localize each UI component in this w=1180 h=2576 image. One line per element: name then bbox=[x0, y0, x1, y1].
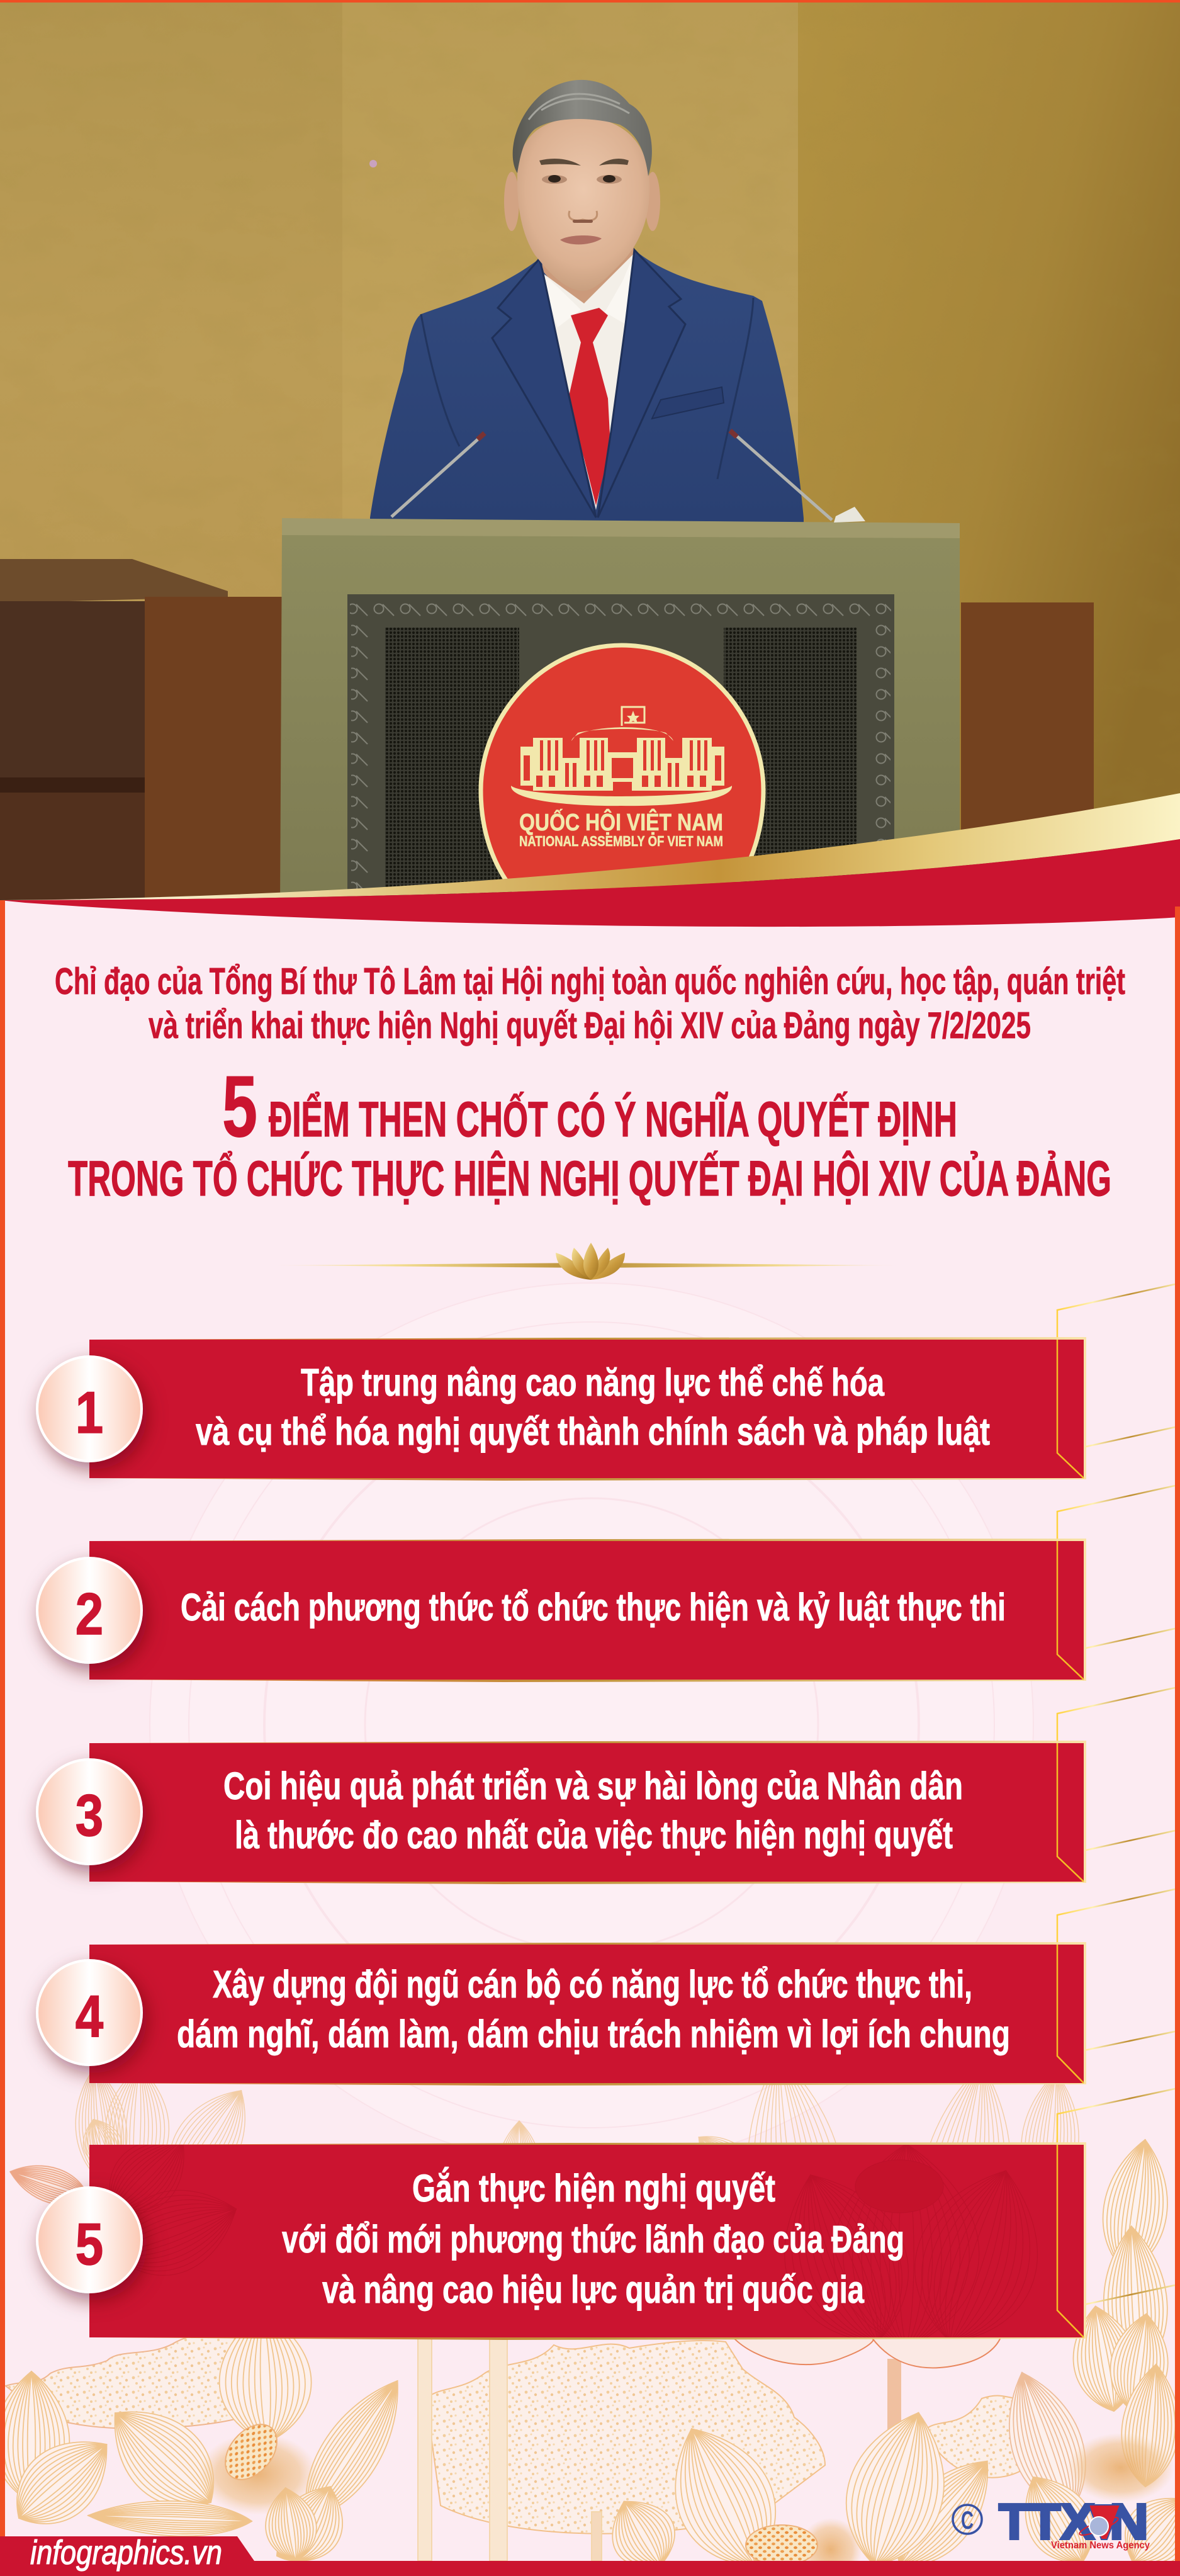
card bbox=[89, 1741, 1086, 1884]
item 2 bbox=[37, 1539, 1086, 1682]
card text: Gắn thực hiện nghị quyết bbox=[412, 2167, 775, 2210]
card text: là thước đo cao nhất của việc thực hiện nghị quyết bbox=[235, 1814, 953, 1856]
emblem text: NATIONAL ASSEMBLY OF VIET NAM bbox=[519, 833, 723, 849]
number badge: 4 bbox=[76, 1984, 104, 2049]
left speaker mesh bbox=[385, 628, 519, 901]
left side petal bbox=[5, 2155, 94, 2213]
suit bbox=[370, 250, 804, 523]
faint upper lotus outlines bbox=[69, 2050, 1084, 2298]
card text bbox=[223, 1765, 963, 1856]
item 3 bbox=[37, 1741, 1086, 1884]
item 5 bbox=[28, 2142, 1086, 2340]
red ribbon bbox=[0, 839, 1180, 927]
lotus seed pod bbox=[746, 2525, 818, 2565]
ears bbox=[504, 172, 660, 231]
agency name: Vietnam News Agency bbox=[1051, 2540, 1150, 2551]
stamen tuft bbox=[1067, 2433, 1174, 2502]
card text: với đổi mới phương thức lãnh đạo của Đảng bbox=[282, 2218, 904, 2261]
emblem text bbox=[519, 808, 723, 849]
frame overlay bbox=[1057, 1340, 1084, 1478]
number badge: 3 bbox=[76, 1783, 103, 1848]
podium inset panel bbox=[347, 594, 894, 903]
TTXVN logo bbox=[953, 2494, 1150, 2551]
tie bbox=[568, 308, 610, 506]
lower flower base under card five bbox=[733, 2337, 1001, 2368]
title: 5 bbox=[222, 1058, 257, 1155]
gold frame: item 2 bbox=[1057, 1486, 1175, 1654]
frame overlay bbox=[1057, 1945, 1084, 2083]
website text: infographics.vn bbox=[30, 2534, 222, 2572]
top border bar bbox=[0, 0, 1180, 3]
frame overlay bbox=[1057, 1541, 1084, 1680]
number badge: 2 bbox=[76, 1581, 103, 1647]
eyebrows bbox=[539, 159, 629, 166]
divider with gold lotus bbox=[269, 1243, 903, 1280]
number badge: 1 bbox=[76, 1380, 103, 1445]
footer tab bbox=[0, 2534, 254, 2572]
card text: và nâng cao hiệu lực quản trị quốc gia bbox=[322, 2268, 865, 2311]
number badge bbox=[37, 1760, 142, 1864]
National Assembly emblem bbox=[481, 645, 763, 900]
stamen tuft bbox=[198, 2433, 318, 2515]
frame overlay bbox=[1057, 2145, 1084, 2337]
icon: gold lotus bbox=[556, 1243, 625, 1280]
centre right flower bbox=[597, 2400, 1011, 2576]
lotus lines showing through card bbox=[110, 2145, 1038, 2337]
right speaker mesh bbox=[724, 628, 857, 901]
bottom red bar bbox=[0, 2561, 1180, 2576]
right side petals bbox=[1064, 2135, 1177, 2417]
face bbox=[517, 116, 649, 291]
small petal tips above card five bbox=[76, 2113, 767, 2216]
shirt bbox=[539, 253, 634, 510]
lower left flower bbox=[0, 2310, 422, 2573]
nose bbox=[569, 211, 597, 223]
copyright mark: C bbox=[961, 2507, 974, 2534]
card bbox=[89, 2142, 1086, 2340]
card bbox=[89, 1942, 1086, 2086]
lotus seed pod bbox=[215, 2414, 287, 2490]
speaker figure bbox=[370, 80, 804, 523]
red V bbox=[1089, 2505, 1120, 2539]
card text: Tập trung nâng cao năng lực thể chế hóa bbox=[301, 1361, 885, 1404]
number badge bbox=[37, 2188, 142, 2292]
wall background bbox=[0, 0, 1180, 900]
paper sheet bbox=[834, 507, 865, 523]
gold frame: item 3 bbox=[1057, 1688, 1175, 1856]
emblem dome bbox=[571, 727, 673, 741]
emblem text: QUỐC HỘI VIỆT NAM bbox=[519, 808, 723, 836]
card text bbox=[282, 2167, 904, 2311]
centre dotted lotus leaf bbox=[426, 2341, 825, 2534]
right side border bbox=[1175, 907, 1180, 2576]
lower right bud bbox=[989, 2361, 1180, 2576]
gold frame: item 4 bbox=[1057, 1889, 1175, 2056]
number badge bbox=[37, 1558, 142, 1663]
card text bbox=[196, 1361, 990, 1453]
stamen tuft bbox=[799, 2518, 862, 2576]
sleeve seams bbox=[421, 298, 753, 479]
logo letters: N bbox=[1110, 2494, 1149, 2550]
globe bbox=[1078, 2514, 1120, 2538]
left wooden furniture bbox=[0, 559, 282, 903]
emblem building bbox=[520, 738, 724, 791]
item 1 bbox=[37, 1337, 1086, 1481]
podium bbox=[280, 518, 960, 907]
number badge bbox=[37, 1960, 142, 2065]
background watermark: national emblem bbox=[150, 1283, 1033, 2167]
breast pocket bbox=[652, 387, 724, 419]
copyright mark bbox=[953, 2505, 982, 2534]
emblem base ring bbox=[511, 786, 732, 806]
eyes bbox=[542, 175, 622, 184]
number badge: 5 bbox=[76, 2212, 103, 2277]
ornament band bbox=[350, 598, 891, 619]
upper left bud bbox=[69, 2065, 268, 2208]
hair bbox=[513, 80, 652, 176]
card bbox=[89, 1539, 1086, 1682]
card text bbox=[177, 1963, 1010, 2055]
gold swoosh bbox=[0, 793, 1180, 900]
emblem flag bbox=[622, 707, 644, 726]
card text: Coi hiệu quả phát triển và sự hài lòng của Nhân dân bbox=[223, 1765, 963, 1807]
lower pink panel bbox=[0, 900, 1180, 2576]
mouth bbox=[560, 235, 602, 244]
collar bbox=[539, 253, 634, 327]
item 4 bbox=[37, 1942, 1086, 2086]
left ornament column bbox=[351, 619, 370, 896]
frame overlay bbox=[1057, 1743, 1084, 1882]
lapels bbox=[492, 250, 685, 517]
lotus stems bbox=[418, 2337, 901, 2561]
subtitle bbox=[55, 961, 1125, 1046]
card bbox=[89, 1337, 1086, 1481]
right dotted lotus leaf bbox=[925, 2396, 1020, 2478]
right wooden furniture bbox=[961, 602, 1094, 898]
logo letters: TTX bbox=[999, 2494, 1094, 2550]
left side border bbox=[0, 900, 5, 2576]
upper right petals bbox=[732, 2050, 1084, 2298]
left dotted lotus leaf bbox=[6, 2329, 235, 2429]
logo letters bbox=[999, 2494, 1149, 2550]
lotus illustration background bbox=[0, 2135, 1180, 2576]
right ornament column bbox=[872, 619, 891, 896]
title bbox=[68, 1058, 1111, 1206]
photo: speaker at the podium bbox=[0, 0, 1180, 907]
gold frame: item 1 bbox=[1057, 1284, 1175, 1453]
neck bbox=[541, 233, 634, 303]
microphones bbox=[391, 431, 832, 520]
card text: và cụ thể hóa nghị quyết thành chính sách và pháp luật bbox=[196, 1410, 990, 1453]
gold frame: item 5 bbox=[1057, 2089, 1175, 2310]
number badge bbox=[37, 1357, 142, 1461]
